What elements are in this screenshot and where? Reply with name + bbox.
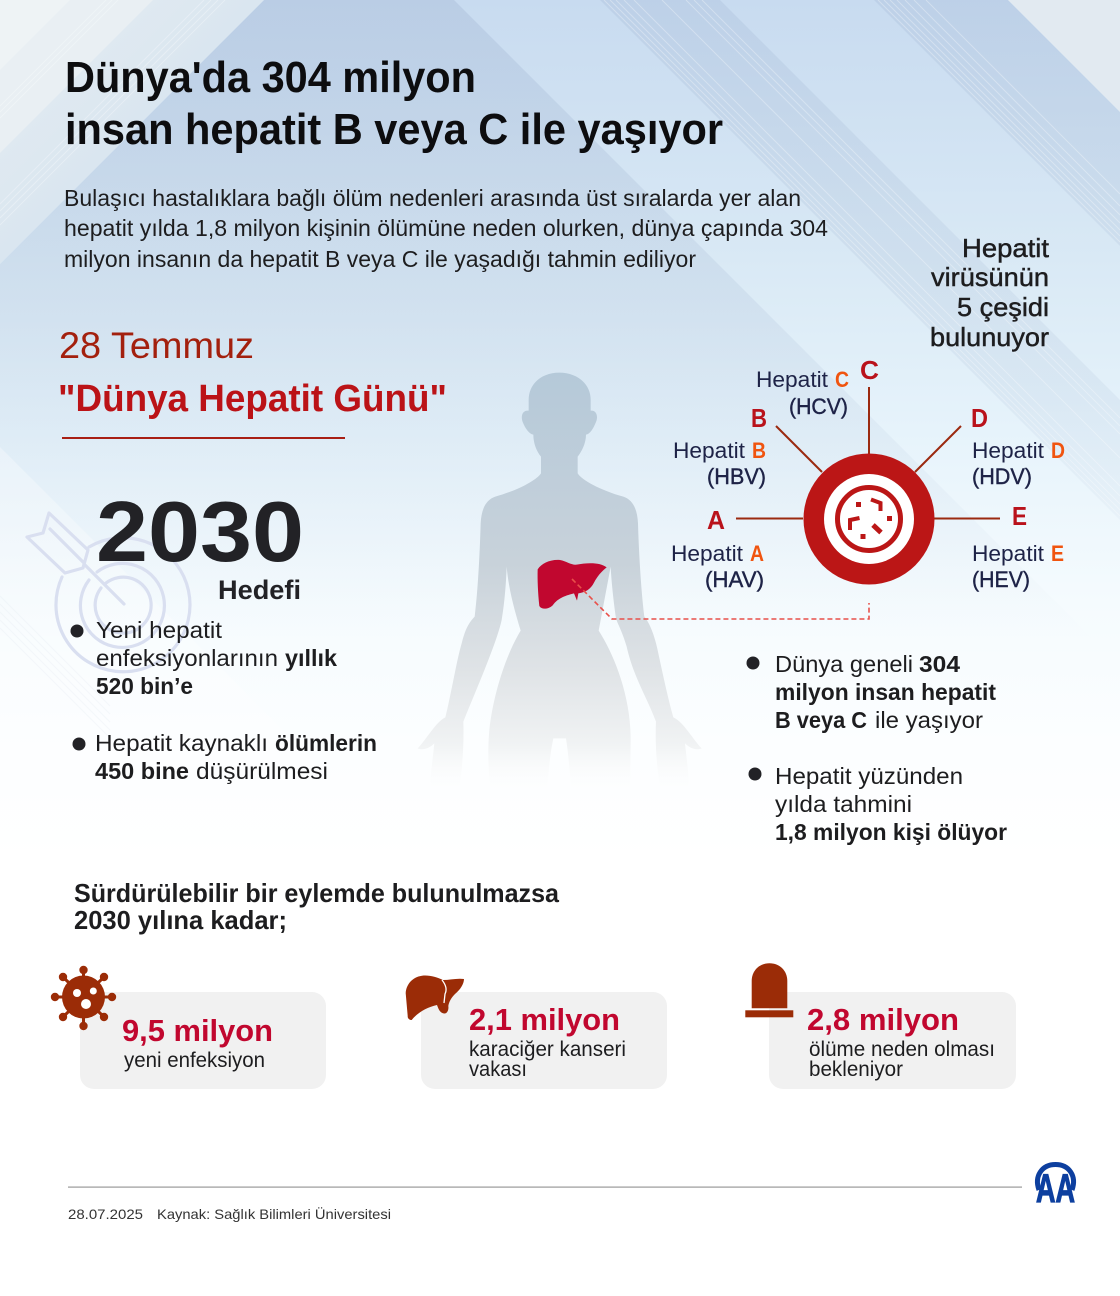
label: hepatitis C: Hepatit (756, 367, 829, 392)
fact bullet: 1.8 million deaths: Hepatit yüzünden (775, 763, 963, 789)
card: deaths: bekleniyor (809, 1058, 903, 1081)
label: hepatitis C: C (835, 367, 849, 392)
label: hepatitis C (756, 355, 879, 419)
footer source: Kaynak: Sağlık Bilimleri Üniversitesi (157, 1205, 391, 1222)
card: deaths: 2,8 milyon (807, 1002, 959, 1037)
fact bullet: 304 million (746, 651, 996, 733)
liver organ (538, 560, 607, 609)
card: liver cancer: 2,1 milyon (469, 1002, 620, 1037)
card: liver cancer: karaciğer kanseri (469, 1038, 626, 1061)
card: new infections: yeni enfeksiyon (124, 1049, 265, 1072)
heading: five virus types: bulunuyor (930, 322, 1049, 352)
goal bullet: deaths: 450 bine (95, 758, 189, 784)
footer source: 28.07.2025 (68, 1206, 143, 1222)
card: new infections (51, 966, 326, 1089)
goal bullet: deaths (72, 730, 377, 784)
section heading: by 2030: 2030 yılına kadar; (74, 905, 287, 935)
diagram: hepatitis virus spokes (736, 387, 1000, 518)
label: hepatitis D: Hepatit (972, 438, 1045, 463)
label: hepatitis D: D (1051, 438, 1065, 463)
title (65, 53, 723, 154)
footer source (68, 1186, 1022, 1222)
intro paragraph (64, 185, 828, 272)
label: hepatitis C: C (860, 355, 879, 385)
label: hepatitis D: (HDV) (972, 464, 1032, 489)
icon: target with arrow (27, 513, 190, 672)
icon: virus circle (804, 454, 934, 584)
label: hepatitis B (673, 403, 767, 489)
goal bullet: deaths: ölümlerin (275, 730, 377, 756)
card: deaths: ölüme neden olması (809, 1038, 995, 1061)
title: Dünya'da 304 milyon (65, 53, 476, 102)
intro paragraph: Bulaşıcı hastalıklara bağlı ölüm nedenleri arasında üst sıralarda yer alan (64, 185, 801, 211)
icon: liver (406, 976, 464, 1020)
label: hepatitis A: A (750, 541, 764, 566)
label: hepatitis B: (HBV) (707, 464, 766, 489)
label: hepatitis A: A (707, 505, 725, 535)
goal bullet: new infections: enfeksiyonlarının (96, 645, 278, 671)
fact bullet: 304 million: 304 (919, 651, 960, 677)
label: hepatitis D (971, 403, 1065, 489)
label: hepatitis B: Hepatit (673, 438, 746, 463)
card: deaths (745, 963, 1016, 1089)
card: liver cancer (406, 976, 667, 1089)
label: hepatitis E (972, 501, 1064, 592)
human silhouette (418, 373, 702, 797)
icon: virus (51, 966, 116, 1030)
intro paragraph: hepatit yılda 1,8 milyon kişinin ölümüne neden olurken, dünya çapında 304 (64, 215, 828, 241)
label: hepatitis D: D (971, 403, 988, 433)
heading: five virus types: 5 çeşidi (957, 292, 1049, 322)
label: hepatitis C: (HCV) (789, 394, 848, 419)
logo: AA (1036, 1164, 1075, 1211)
fact bullet: 1.8 million deaths: yılda tahmini (775, 791, 912, 817)
heading: world hepatitis day: 28 Temmuz (59, 325, 254, 366)
card: liver cancer: vakası (469, 1058, 527, 1081)
label: hepatitis E: (HEV) (972, 567, 1030, 592)
heading: five virus types (930, 233, 1050, 352)
fact bullet: 1.8 million deaths: 1,8 milyon kişi ölüyor (775, 819, 1007, 845)
label: hepatitis E: E (1051, 541, 1064, 566)
label: hepatitis B: B (752, 438, 766, 463)
label: hepatitis E: E (1012, 501, 1027, 531)
fact bullet: 1.8 million deaths (748, 763, 1007, 845)
label: hepatitis B: B (751, 403, 767, 433)
icon: gravestone (745, 963, 793, 1017)
heading: five virus types: Hepatit (962, 233, 1050, 263)
goal bullet: deaths: Hepatit kaynaklı (95, 730, 268, 756)
goal bullet: new infections (70, 617, 338, 699)
label: hepatitis A: (HAV) (705, 567, 764, 592)
heading: world hepatitis day (58, 325, 447, 439)
goal bullet: new infections: 520 bin’e (96, 673, 193, 699)
fact bullet: 304 million: ile yaşıyor (875, 707, 983, 733)
section heading: by 2030: Sürdürülebilir bir eylemde bulunulmazsa (74, 878, 560, 908)
dashed connector (572, 579, 869, 619)
label: hepatitis E: Hepatit (972, 541, 1045, 566)
heading: world hepatitis day: "Dünya Hepatit Günü" (58, 378, 447, 420)
goal bullet: deaths: düşürülmesi (196, 758, 328, 784)
label: hepatitis A: Hepatit (671, 541, 744, 566)
fact bullet: 304 million: Dünya geneli (775, 651, 913, 677)
title: insan hepatit B veya C ile yaşıyor (65, 105, 723, 154)
section heading: by 2030 (74, 878, 560, 935)
card: new infections: 9,5 milyon (122, 1013, 273, 1048)
2030 goal heading: 2030 (96, 485, 304, 580)
label: hepatitis A (671, 505, 764, 592)
intro paragraph: milyon insanın da hepatit B veya C ile yaşadığı tahmin ediliyor (64, 246, 696, 272)
2030 goal heading: Hedefi (218, 575, 301, 605)
goal bullet: new infections: Yeni hepatit (96, 617, 222, 643)
goal bullet: new infections: yıllık (285, 645, 338, 671)
fact bullet: 304 million: B veya C (775, 707, 867, 733)
logo: AA: AA (1036, 1167, 1075, 1211)
fact bullet: 304 million: milyon insan hepatit (775, 679, 996, 705)
heading: five virus types: virüsünün (931, 262, 1049, 292)
